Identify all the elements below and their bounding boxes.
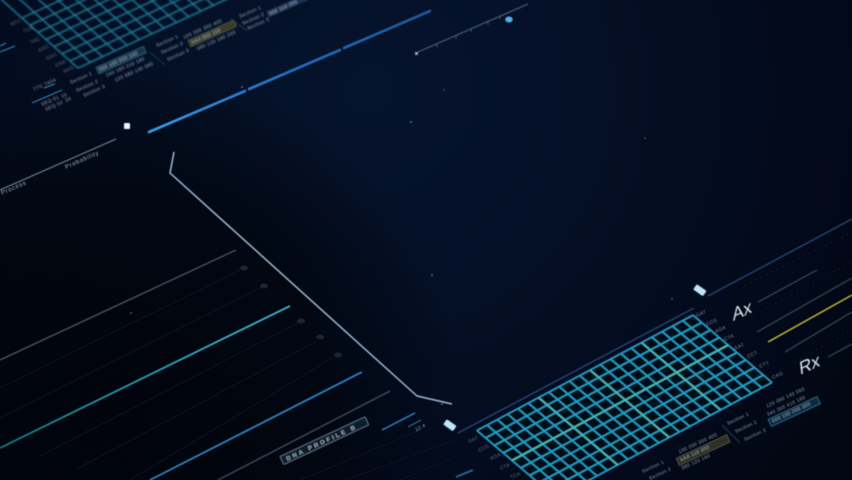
blue level line	[150, 372, 362, 480]
main grid top rule	[458, 219, 852, 433]
lower-right data table: 340 260 410 180	[766, 395, 807, 418]
lower-right data table: Section 3	[743, 427, 767, 443]
top-left data table: Section 2	[241, 12, 265, 27]
blue strokes lower left of grid	[456, 470, 473, 477]
lower-right data table: 000 100 200 300	[771, 401, 812, 424]
Rx label: Rx	[798, 350, 821, 379]
grid axis labels: CCG	[705, 318, 719, 328]
right level lines	[745, 232, 852, 365]
top-left data table: Section 2	[160, 41, 184, 56]
label: probability: Probability	[64, 150, 100, 171]
main angled outline	[170, 152, 452, 404]
grid axis labels	[695, 309, 784, 381]
grid axis labels: CCT	[746, 350, 759, 360]
lower faint lines	[300, 430, 460, 480]
grid axis labels: GAT	[733, 342, 746, 352]
small blue readout strokes	[0, 43, 62, 103]
top-left data table	[32, 0, 314, 113]
top-left grid chart	[0, 0, 250, 75]
top-left data table: 15	[60, 92, 68, 100]
lower-right data table: Section 1	[726, 411, 750, 427]
faint track lines	[0, 270, 334, 480]
lower-right data table: 100 200 300 400	[678, 432, 718, 455]
top-left data table: 24	[64, 96, 72, 104]
faint track end dots	[240, 266, 342, 358]
top-left data table: TTC 7424	[32, 77, 57, 93]
top-left data table: Section 3	[82, 84, 106, 99]
main teal grid chart: CCG	[477, 444, 491, 454]
yellow level line	[768, 295, 852, 342]
white marker top-left	[124, 123, 130, 129]
grid axis labels: AGA	[714, 325, 728, 335]
top-left data table: SEQ 01	[40, 95, 60, 108]
top-left grid axis labels: TCC	[22, 25, 35, 35]
top-left data table: 100 200 300 400	[182, 18, 223, 41]
process and probability axis	[0, 139, 116, 197]
DNA profile tag	[280, 417, 369, 465]
main teal grid chart: CTA	[499, 462, 512, 472]
highlighted grid lines	[477, 315, 772, 480]
star specks	[130, 86, 673, 405]
grid axis labels: GAT	[695, 309, 708, 319]
gray level line	[218, 391, 390, 480]
top-left data table: 240 160 210 180	[105, 56, 146, 79]
label: process: Process	[0, 180, 28, 197]
top-left data table: 000 110 200	[268, 0, 299, 17]
cyan level line	[0, 306, 290, 448]
lower-right data table: Section 2	[734, 419, 758, 435]
main teal grid chart: AGA	[489, 452, 503, 462]
bright chip upper	[693, 284, 707, 296]
grid axis labels: CAG	[771, 371, 784, 381]
top-left grid axis labels: AAG	[62, 65, 75, 75]
main teal grid chart: GAT	[467, 435, 480, 445]
top-left grid axis labels: TAC	[29, 36, 41, 46]
Ax label: Ax	[731, 296, 753, 325]
bright chip lower	[443, 419, 457, 431]
lower-right data table: Section 1	[641, 459, 665, 475]
top-left data table: Section 1	[238, 5, 262, 20]
top-left data table: SEQ 02	[44, 100, 64, 113]
top-left grid axis labels: CAA	[54, 59, 67, 69]
top-left grid axis labels	[9, 18, 75, 75]
top blue segmented bar	[149, 11, 430, 132]
top-left data table: AAA 000 110	[190, 27, 222, 46]
grid axis labels: CTT	[758, 360, 770, 370]
top-left data table: Section 1	[69, 71, 93, 86]
small blue readout: 12.4	[414, 423, 427, 433]
top-left grid axis labels: AGC	[37, 44, 51, 54]
top-left data table: 120 080 140 060	[114, 61, 155, 84]
top-left data table: Section 2	[75, 79, 99, 94]
small blue readout	[382, 413, 427, 433]
lower-right data table: 120 080 140 060	[765, 386, 806, 409]
top-left data table: 080 120 160 200	[196, 30, 237, 52]
grid axis labels: CTA	[723, 333, 736, 343]
top-left data table: Section 1	[155, 34, 179, 49]
top scale	[415, 4, 528, 55]
main teal grid chart	[456, 309, 784, 480]
top-left data table: 000 100 000 100	[98, 50, 139, 73]
top-left grid axis labels: ACC	[9, 18, 22, 28]
top-left grid axis labels: GAC	[45, 52, 59, 62]
lower-right data table: AAA 110 000	[679, 444, 711, 463]
DNA profile tag: DNA PROFILE B	[286, 424, 359, 463]
scale marker	[505, 16, 513, 22]
left gray line	[0, 250, 236, 360]
top-left data table: Section 3	[166, 48, 190, 63]
top-left data table: Section 3	[246, 17, 270, 32]
lower-right data table	[641, 383, 820, 480]
lower-right data table: 080 120 160	[681, 453, 711, 471]
grid dark base	[477, 315, 772, 480]
